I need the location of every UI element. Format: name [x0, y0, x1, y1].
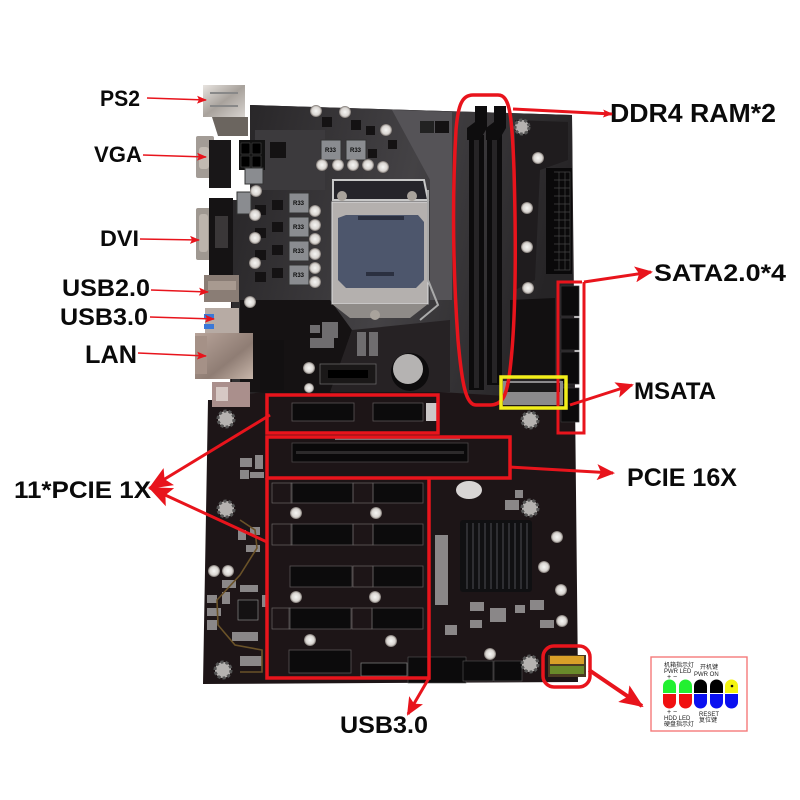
red highlight: top PCIe x1 slots	[267, 395, 438, 433]
upper PCB area	[232, 105, 574, 400]
VRM choke labels: R33	[325, 148, 337, 154]
QR label	[426, 403, 438, 421]
VRM choke labels: R33	[293, 249, 305, 255]
bottom 4-pin power	[361, 663, 407, 676]
PCIe x16 slot	[292, 437, 468, 462]
legend text	[664, 661, 719, 728]
arrow: MSATA	[570, 385, 632, 405]
arrow: front panel	[589, 670, 642, 706]
DIMM slot 1	[467, 106, 487, 390]
VRM choke labels: R33	[293, 273, 305, 279]
VRM chokes	[237, 140, 366, 285]
legend pill: black blue 2	[710, 680, 723, 709]
label: DVI: DVI	[100, 226, 139, 251]
CPU socket	[332, 180, 438, 320]
ATX 4-pin connector	[239, 140, 265, 170]
IO: DVI port	[196, 198, 233, 276]
label: MSATA: MSATA	[634, 378, 716, 405]
IO: PS2 bracket	[203, 85, 248, 136]
legend text: RESET	[699, 712, 719, 718]
arrow: LAN	[138, 353, 206, 356]
heatsink	[460, 520, 532, 592]
VRM choke labels	[293, 148, 362, 279]
red highlight: front panel header	[543, 646, 590, 687]
LAN chip	[260, 340, 284, 390]
IO: USB3.0 port	[204, 308, 239, 333]
arrow: PS2	[147, 98, 206, 100]
front panel legend	[651, 657, 747, 731]
legend text: 机箱指示灯	[664, 661, 694, 669]
label: SATA2.0*4: SATA2.0*4	[654, 260, 787, 287]
legend pill: black blue	[694, 680, 707, 709]
controller chip	[238, 600, 258, 620]
legend text: HDD LED	[664, 716, 691, 722]
label: DDR4 RAM*2: DDR4 RAM*2	[610, 98, 776, 128]
legend text: + −	[667, 709, 677, 716]
arrow: VGA	[143, 155, 206, 157]
arrow: SATA	[584, 272, 651, 282]
MSATA slot	[503, 381, 563, 405]
ATX 24-pin connector	[546, 168, 572, 274]
label: PCIE 16X: PCIE 16X	[627, 464, 737, 492]
IO: lower port	[212, 382, 250, 407]
label: USB3.0 top: USB3.0	[60, 304, 148, 331]
label: PS2: PS2	[100, 86, 140, 111]
capacitors	[244, 105, 544, 393]
legend text: 复位键	[699, 716, 717, 724]
chipset cluster	[310, 322, 378, 356]
red highlight: DDR4 slots	[454, 95, 515, 405]
brown trace	[217, 520, 262, 672]
IO: LAN port	[195, 333, 253, 379]
label: 11*PCIE 1X: 11*PCIE 1X	[14, 477, 151, 504]
legend frame	[651, 657, 747, 731]
DIMM slot 2	[486, 106, 506, 385]
IO: USB2.0 port	[204, 275, 239, 302]
battery	[391, 353, 429, 391]
top PCIe x1 slots	[292, 403, 423, 421]
bottom headers	[408, 657, 522, 683]
IO: VGA port	[196, 136, 231, 188]
SATA connectors	[561, 286, 579, 422]
label: VGA: VGA	[94, 142, 142, 167]
VRM choke labels: R33	[350, 148, 362, 154]
legend text: PWR ON	[694, 672, 719, 678]
slot capacitors	[208, 507, 568, 660]
legend text: 开机键	[700, 663, 718, 671]
front panel header	[548, 655, 586, 677]
label: USB3.0 bottom: USB3.0	[340, 712, 428, 739]
label: LAN: LAN	[85, 341, 137, 369]
label: USB2.0: USB2.0	[62, 275, 150, 302]
arrow: PCIE 16X	[509, 467, 613, 473]
legend text: PWR LED	[664, 669, 692, 675]
VRM choke labels: R33	[293, 201, 305, 207]
arrow: DDR4 RAM	[513, 109, 612, 114]
red highlight: SATA connectors	[558, 282, 584, 433]
arrow: DVI	[140, 239, 199, 240]
board PCB	[203, 105, 578, 684]
legend pill: yellow blue	[725, 680, 738, 709]
legend text: 硬盘指示灯	[664, 720, 694, 728]
legend pill: green red 2	[679, 680, 692, 709]
legend pill: green red	[663, 680, 676, 709]
legend text: + −	[667, 674, 677, 681]
PCIe x1 slot grid	[289, 483, 423, 673]
red highlight: PCIe x1 grid	[267, 478, 429, 678]
arrow: USB3.0	[150, 317, 214, 319]
motherboard	[195, 85, 586, 684]
4-pin power connector	[320, 364, 376, 384]
PCIe slot outlines	[272, 483, 373, 629]
yellow highlight: MSATA slot	[501, 377, 566, 408]
arrow: USB3.0 bottom	[408, 678, 429, 714]
screw mounts	[215, 120, 538, 678]
red highlight: PCIe x16 slot	[267, 437, 510, 478]
VRM chips	[255, 117, 449, 282]
chipset label	[456, 481, 482, 499]
silkscreen and small components	[207, 455, 554, 666]
arrows: PCIE 1X	[150, 415, 270, 542]
VRM choke labels: R33	[293, 225, 305, 231]
arrow: USB2.0	[151, 290, 208, 292]
